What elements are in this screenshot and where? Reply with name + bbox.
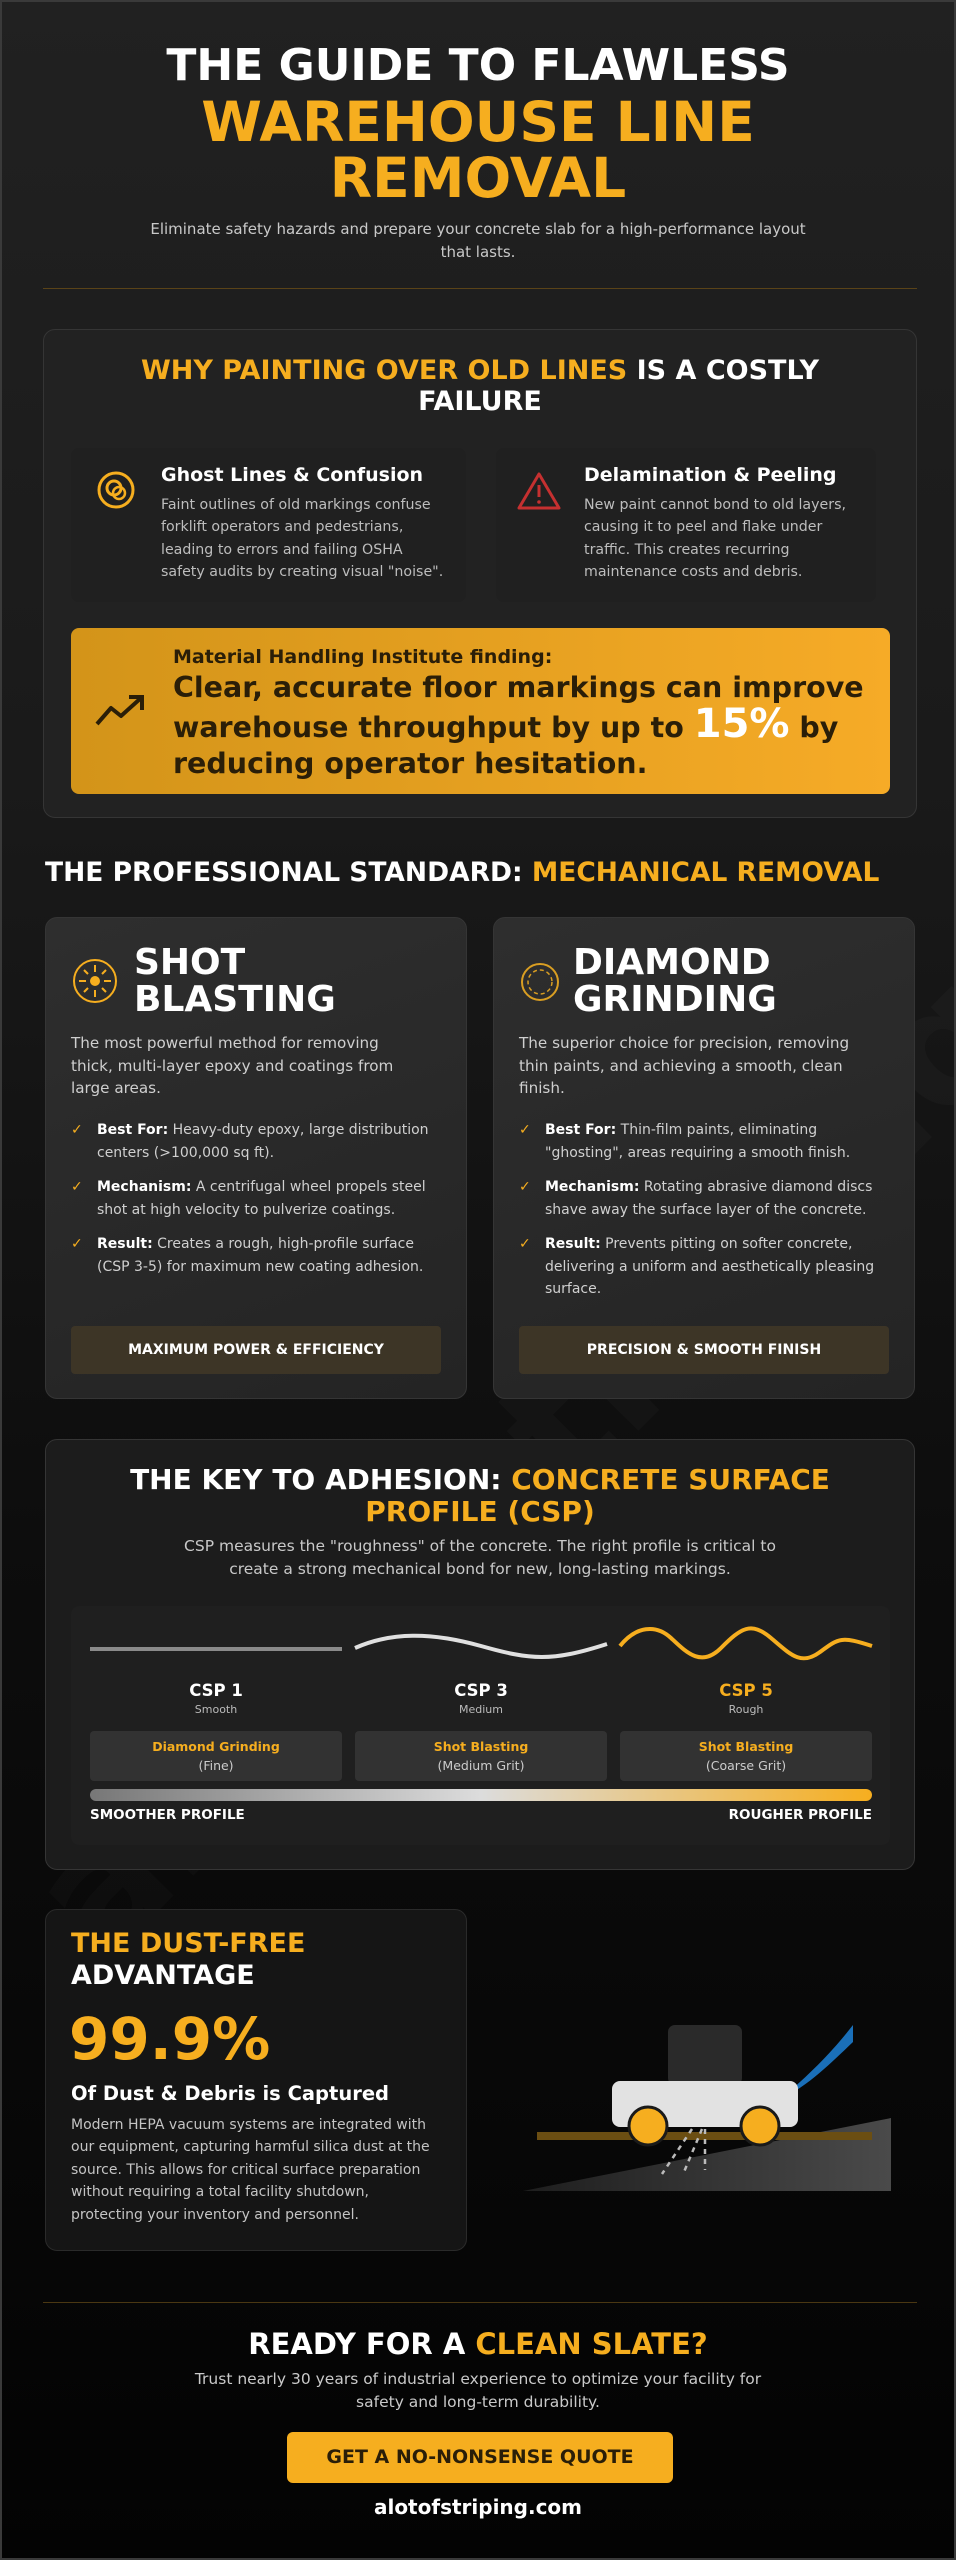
CSP chart: CSP 5	[719, 1681, 773, 1700]
panel: dust-free: Modern HEPA vacuum systems are integrated with our equipment, capturing harmful silica dust at the source. This allows for critical surface preparation without requiring a total facility shutdown, protecting your inventory and personnel.	[71, 2117, 430, 2223]
bullet list: ✓	[519, 1122, 531, 1138]
bullet list: ✓	[519, 1236, 531, 1252]
CSP chart: CSP 3	[454, 1681, 508, 1700]
CSP chart: Smooth	[195, 1703, 237, 1716]
card: ghost lines: leading to errors and failing OSHA	[161, 542, 403, 558]
CTA heading: READY FOR A CLEAN SLATE?	[248, 2327, 708, 2361]
heading: THE KEY TO ADHESION: CONCRETE SURFACE PROFILE (CSP)	[130, 1463, 830, 1528]
panel: dust-free: THE DUST-FREE	[71, 1928, 305, 1959]
icon: blast	[73, 959, 117, 1003]
badge	[519, 1326, 889, 1374]
CSP chart: SMOOTHER PROFILE	[90, 1807, 245, 1823]
method boxes	[90, 1731, 342, 1781]
panel: dust-free	[45, 1909, 467, 2251]
profile lines	[90, 1626, 873, 1660]
card: ghost lines	[71, 448, 466, 602]
bullet list: Result: Prevents pitting on softer concrete, delivering a uniform and aesthetically pleasing surface.	[545, 1236, 874, 1297]
bullet list: ✓	[519, 1179, 531, 1195]
panel: diamond grinding: DIAMOND	[573, 942, 771, 983]
badge	[71, 1326, 441, 1374]
bullet list: Mechanism: A centrifugal wheel propels steel shot at high velocity to pulverize coatings.	[97, 1179, 426, 1218]
panel: CSP: CSP measures the "roughness" of the concrete. The right profile is critical to create a strong mechanical bond for new, long-lasting markings.	[184, 1537, 776, 1578]
CSP chart: (Medium Grit)	[438, 1758, 524, 1773]
panel: why painting over fails	[43, 329, 917, 818]
panel: diamond grinding: GRINDING	[573, 979, 777, 1020]
icon: trend arrow	[96, 695, 144, 726]
card: ghost lines: Faint outlines of old markings confuse	[161, 497, 431, 513]
panel: shot blasting	[45, 917, 467, 1399]
panel: diamond grinding	[493, 917, 915, 1399]
CSP chart: (Coarse Grit)	[706, 1758, 786, 1773]
bullet list: ✓	[71, 1236, 83, 1252]
card: ghost lines: forklift operators and pedestrians,	[161, 519, 403, 535]
card: delamination: New paint cannot bond to old layers, causing it to peel and flake under traffic. This creates recurring maintenance costs and debris.	[584, 497, 846, 580]
panel: diamond grinding: The superior choice for precision, removing thin paints, and achieving a smooth, clean finish.	[519, 1034, 849, 1097]
title: THE GUIDE TO FLAWLESS	[166, 40, 790, 91]
heading: professional standard: THE PROFESSIONAL STANDARD: MECHANICAL REMOVAL	[45, 857, 879, 888]
callout: MHI finding: Clear, accurate floor markings can improve warehouse throughput by up to 15% by reducing operator hesitation.	[173, 671, 864, 780]
bullet list: ✓	[71, 1179, 83, 1195]
bullet list: Best For: Thin-film paints, eliminating "ghosting", areas requiring a smooth finish.	[545, 1122, 850, 1160]
panel: dust-free: ADVANTAGE	[71, 1960, 255, 1991]
panel: shot blasting: The most powerful method for removing thick, multi-layer epoxy and coatings from large areas.	[71, 1034, 393, 1097]
bullet list	[519, 1122, 874, 1297]
CSP chart: Shot Blasting	[434, 1739, 528, 1754]
method boxes: (Fine)	[198, 1758, 234, 1773]
card: ghost lines: safety audits by creating visual "noise".	[161, 564, 443, 580]
heading: WHY PAINTING OVER OLD LINES IS A COSTLY FAILURE	[141, 355, 819, 417]
bullet list	[71, 1122, 429, 1274]
panel: CSP	[45, 1439, 915, 1870]
callout: MHI finding: Material Handling Institute finding:	[173, 646, 552, 668]
CSP chart: Shot Blasting	[699, 1739, 793, 1754]
icon: warning triangle	[518, 472, 561, 510]
illustration: vacuum grinder machine	[524, 2025, 891, 2191]
badge: MAXIMUM POWER & EFFICIENCY	[128, 1342, 384, 1358]
CSP chart: CSP 1	[189, 1681, 243, 1700]
icon: ghost rings	[98, 472, 134, 508]
gradient scale	[90, 1789, 872, 1801]
bullet list: Best For: Heavy-duty epoxy, large distribution centers (>100,000 sq ft).	[97, 1122, 429, 1160]
card: delamination: Delamination & Peeling	[584, 464, 836, 486]
icon: grinding disc	[521, 963, 559, 1001]
CTA button: GET A NO-NONSENSE QUOTE	[326, 2446, 634, 2468]
text: Trust nearly 30 years of industrial experience to optimize your facility for safety and long-term durability.	[195, 2370, 761, 2410]
bullet list: ✓	[71, 1122, 83, 1138]
CTA button	[287, 2432, 673, 2483]
panel: shot blasting: BLASTING	[134, 979, 336, 1020]
panel: dust-free: Of Dust & Debris is Captured	[71, 2082, 389, 2105]
callout: MHI finding	[71, 628, 890, 794]
card: ghost lines: Ghost Lines & Confusion	[161, 464, 423, 486]
CSP chart: Medium	[459, 1703, 503, 1716]
bullet list: Mechanism: Rotating abrasive diamond discs shave away the surface layer of the concrete.	[545, 1179, 872, 1218]
footer url: alotofstriping.com	[374, 2495, 582, 2519]
badge: PRECISION & SMOOTH FINISH	[587, 1342, 821, 1358]
card: delamination	[496, 448, 876, 602]
title: REMOVAL	[330, 146, 626, 210]
CSP chart	[71, 1606, 890, 1845]
subtitle: Eliminate safety hazards and prepare your concrete slab for a high-performance layout that lasts.	[150, 220, 806, 261]
method boxes: Diamond Grinding	[152, 1739, 280, 1754]
CSP chart: ROUGHER PROFILE	[729, 1807, 872, 1823]
bullet list: Result: Creates a rough, high-profile surface (CSP 3-5) for maximum new coating adhesion.	[97, 1236, 423, 1274]
title: WAREHOUSE LINE	[201, 90, 755, 154]
panel: dust-free: 99.9%	[69, 2005, 270, 2073]
panel: shot blasting: SHOT	[134, 942, 245, 983]
CSP chart: Rough	[729, 1703, 763, 1716]
title	[166, 40, 790, 210]
